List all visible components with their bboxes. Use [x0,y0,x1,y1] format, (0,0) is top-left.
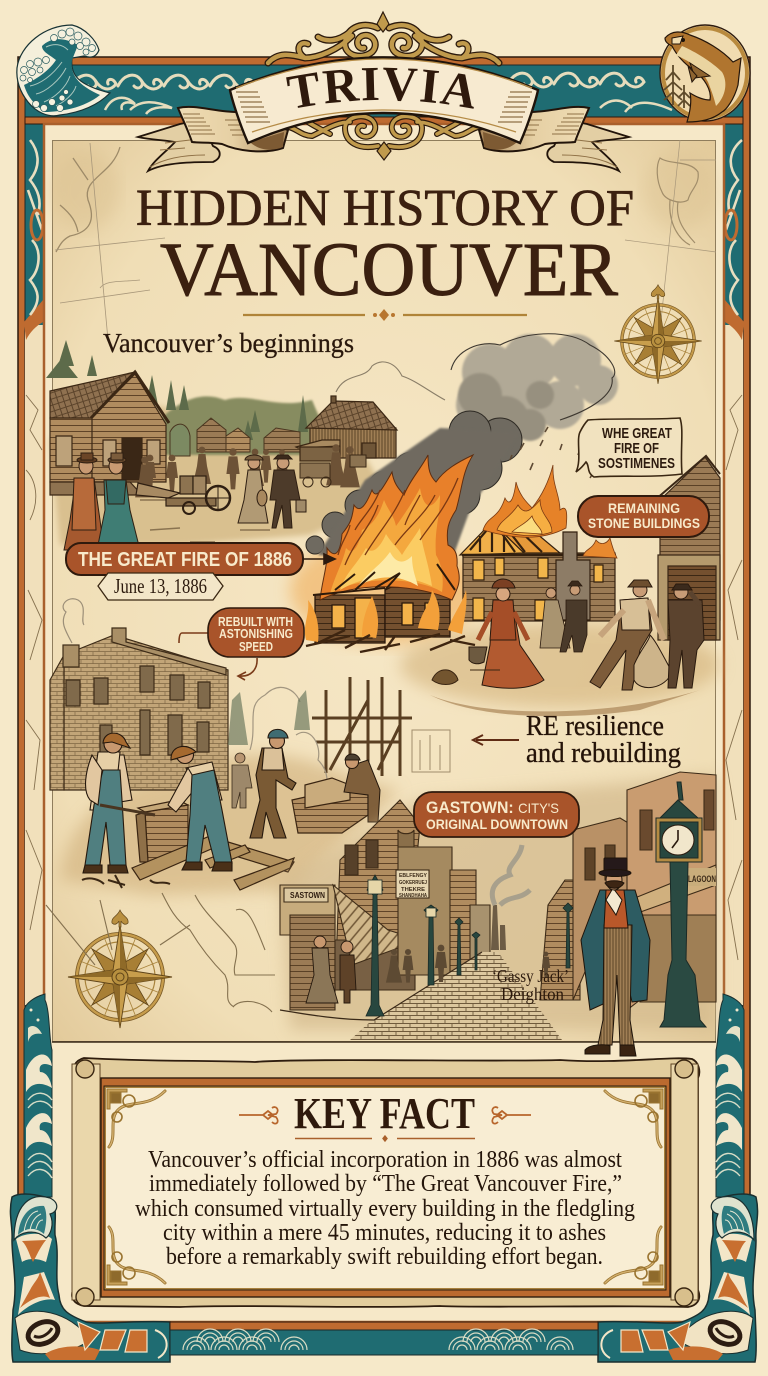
small village houses [170,418,300,456]
right brick buildings: LAGOON [688,874,716,884]
icon: compass rose upper [614,285,702,384]
key fact text: before a remarkably swift rebuilding effort began. [166,1244,603,1270]
banner: trivia [228,56,540,145]
connector: rebuilt callout to scaffold [238,658,257,680]
totem corner bottom left [10,1194,170,1362]
callout: remaining stone buildings: REMAINING [608,500,680,516]
callout: when great fire bubble: WHE GREAT [602,425,672,442]
right brick buildings [540,772,716,1010]
second house [296,396,397,461]
title divider [243,309,527,321]
callout: rebuilt: REBUILT WITH [218,615,293,629]
key fact text [135,1147,635,1270]
second cart [300,455,366,487]
flame: rear fire [483,465,617,558]
big wooden house [50,372,169,495]
rubble [306,630,475,652]
sidewalk fringe [280,952,482,1020]
text: shop signs: GOKERRUEJ [399,880,427,886]
roof rafters [313,564,455,595]
scene: early town [46,340,397,550]
fish body [665,32,741,122]
chimney smoke [63,599,84,643]
text: shop signs: SASTOWN [290,890,325,900]
scene: rebuilding [50,599,450,895]
connector: rebuilt callout to building [179,633,208,643]
cobblestone street [350,952,562,1040]
callout: rebuilt: SPEED [239,640,273,654]
pedestrians couple [306,936,356,1003]
worker right [168,746,232,871]
text: shop signs: EBLFENGY [399,873,428,879]
label: the great fire of 1886: THE GREAT FIRE OF 1886 [78,549,292,571]
key fact text: Vancouver’s official incorporation in 1886 was almost [148,1147,622,1173]
text: shop signs [290,873,428,900]
background worker [232,753,252,808]
heading: key fact: KEY FACT [294,1089,475,1138]
callout: when great fire bubble: SOSTIMENES [598,455,675,472]
key fact text: city within a mere 45 minutes, reducing it to ashes [163,1220,606,1246]
callout: gastown: ORIGINAL DOWNTOWN [426,817,568,832]
fern [664,65,690,108]
gassy jack figure [581,858,650,1056]
title: HIDDEN HISTORY OF [136,180,634,237]
callout: when great fire bubble: FIRE OF [614,440,659,457]
couple in background [540,581,587,652]
ribbon tail right [479,107,629,171]
callout: rebuilt: ASTONISHING [219,627,293,641]
key fact text: which consumed virtually every building in the fledgling [135,1196,635,1222]
caption: gassy jack [492,966,569,1004]
worker bending [344,754,380,822]
trees behind [228,690,310,745]
front burning cabin [315,565,450,643]
factory chimneys [491,905,506,950]
callout: gastown: GASTOWN: CITY'S [426,798,559,817]
ornament: gold scroll below banner [288,116,479,160]
worker left [83,733,155,873]
woman fleeing [469,579,544,688]
stone block crate [292,778,368,833]
label: the great fire of 1886 [66,543,303,575]
inner parchment panel [44,124,724,1322]
ribbon tail left [138,107,288,171]
wave columns lower left [24,994,52,1197]
street lamps [366,875,573,1016]
panel: key fact scroll [72,1058,699,1307]
man with bag [270,455,306,528]
debris [432,670,500,684]
factory smoke [492,845,530,905]
callout: remaining stone buildings: STONE BUILDINGS [588,515,700,531]
arrow: to the fire [303,554,335,564]
left shopfront buildings [280,800,490,1010]
heading: resilience and rebuilding: and rebuilding [526,738,681,769]
heading: resilience and rebuilding: RE resilience [526,711,664,742]
flourish left [239,1107,278,1124]
pedestrians distant [386,945,550,983]
corner ornaments [107,1089,663,1285]
tools on ground [82,875,170,888]
ornament: gold scroll above banner [268,12,499,63]
heading: beginnings: Vancouver’s beginnings [103,328,354,358]
icon: compass rose lower [68,910,172,1028]
wave columns lower right [716,994,744,1197]
scene: burning buildings [305,427,720,716]
aged map area [51,140,716,1042]
banner: trivia: TRIVIA [286,68,474,109]
map sketch: coastline [46,893,275,1012]
steam clouds [250,687,327,790]
callout: remaining stone buildings [578,496,709,537]
rear burning house [460,522,616,621]
ground dirt [430,690,700,716]
timber crate [136,800,188,862]
title [136,180,634,312]
totem corner bottom right [598,1194,758,1362]
label: date: June 13, 1886 [114,574,207,598]
icon: gastown steam clock [656,782,706,1027]
heading divider [295,1136,475,1141]
caption: gassy jack: ‘Gassy Jack’ [492,966,569,986]
callout: when great fire bubble [576,418,682,477]
icon: great wave [17,25,110,116]
flourish right [492,1107,531,1124]
icon: salmon medallion [660,25,750,122]
ground marks [140,500,270,542]
stone building [50,628,228,790]
scene: gastown street [280,772,716,1056]
text: shop signs: SHANDHAHA [399,893,427,899]
man shielding face [668,584,704,688]
two women in dresses [64,453,140,550]
worker with cap [250,729,296,838]
right wooden building [655,456,720,640]
callout: rebuilt [208,608,304,657]
construction scaffold [312,677,450,776]
text: shop signs: THEKRE [401,887,426,893]
title: VANCOUVER [160,228,618,312]
hand cart [136,476,230,514]
crowd of townsfolk [135,444,360,497]
side panels with map strip [24,140,744,1005]
embers [510,427,593,478]
arrow: to rebuilding [473,735,519,745]
woman with basket [238,455,268,523]
callout: gastown [414,792,579,837]
scene: smoke plume [290,334,618,645]
key fact text: immediately followed by “The Great Vancouver Fire,” [149,1171,622,1197]
caption: gassy jack: Deighton [501,984,564,1004]
heading: resilience and rebuilding [526,711,681,769]
bottom teal band [170,1322,598,1355]
ground beams [132,836,294,890]
flame: main fire [305,455,473,642]
man with sack [590,580,672,690]
